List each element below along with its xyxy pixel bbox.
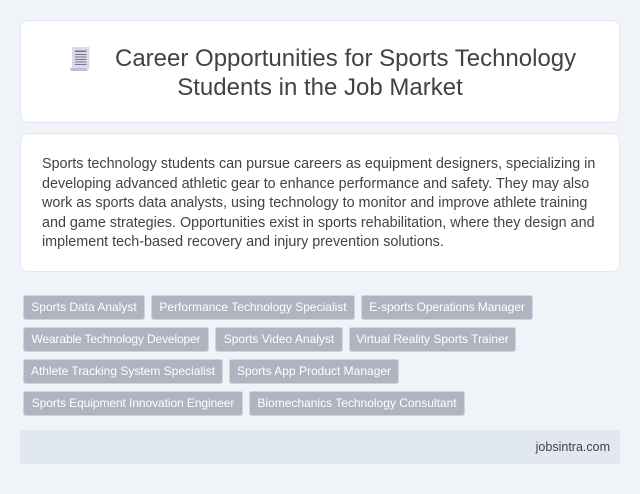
tag — [151, 295, 355, 320]
footer bar — [20, 430, 620, 464]
title: Students in the Job Market — [177, 74, 463, 100]
tag — [229, 359, 399, 384]
panel: description — [20, 133, 620, 272]
tag — [23, 327, 209, 352]
tag — [215, 327, 343, 352]
title — [115, 45, 576, 100]
tag — [249, 391, 465, 416]
description text — [42, 156, 595, 250]
tag: Wearable Technology Developer — [32, 332, 200, 346]
tag — [349, 327, 516, 352]
tag — [23, 391, 243, 416]
tag: Performance Technology Specialist — [159, 300, 347, 314]
tag: Sports Video Analyst — [224, 332, 334, 346]
tag: Biomechanics Technology Consultant — [257, 396, 457, 410]
description text: work as sports data analysts, using technology to monitor and improve athlete training — [42, 195, 587, 211]
panel: header — [20, 20, 620, 123]
description text: and game strategies. Opportunities exist in sports rehabilitation, where they design and — [42, 214, 595, 230]
tag: E-sports Operations Manager — [369, 300, 525, 314]
description text: implement tech-based recovery and injury prevention solutions. — [42, 234, 444, 250]
tag — [23, 359, 223, 384]
tag: Athlete Tracking System Specialist — [31, 364, 215, 378]
title: Career Opportunities for Sports Technology — [115, 45, 576, 72]
tag: Sports App Product Manager — [237, 364, 391, 378]
tag — [361, 295, 533, 320]
icon: document scroll — [70, 47, 90, 71]
tag — [23, 295, 145, 320]
tag: Virtual Reality Sports Trainer — [356, 332, 509, 346]
footer source text: jobsintra.com — [536, 440, 610, 454]
tag: Sports Equipment Innovation Engineer — [32, 396, 234, 410]
tag: Sports Data Analyst — [31, 300, 137, 314]
description text: Sports technology students can pursue careers as equipment designers, specializing in — [42, 156, 595, 172]
tag group: career roles — [23, 295, 533, 416]
description text: developing advanced athletic gear to enhance performance and safety. They may also — [42, 176, 589, 192]
